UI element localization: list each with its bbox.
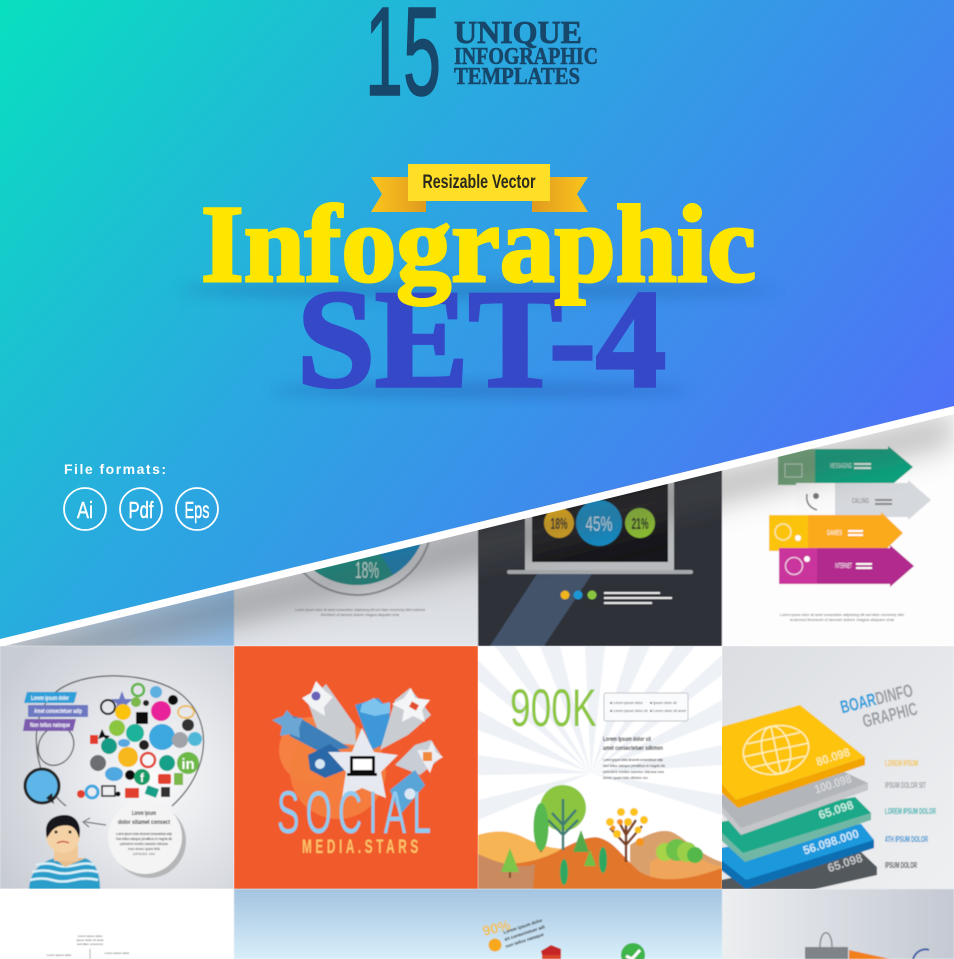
laptop with percentage circles: 21% — [632, 516, 648, 533]
panel: 900K landscape — [478, 646, 722, 889]
legend box: ■ Lorem ipsum dolor sit — [610, 709, 648, 713]
title: SET-4: SET-4 — [297, 262, 666, 417]
pie chart fragment — [282, 445, 432, 617]
small org chart text — [47, 934, 129, 959]
callout circle: Non tellus natoque penatibus et magnis dis — [116, 837, 172, 841]
pie chart fragment: tincidunt ut laoreet dolore magna aliquam erat — [321, 613, 399, 617]
stars — [272, 681, 443, 815]
arrow list: CALLING — [852, 498, 869, 505]
right labels: LOREM IPSUM — [885, 759, 918, 768]
text block — [603, 737, 665, 780]
text block: amet consectetuer sdkmon — [603, 746, 663, 752]
title: Infographic: Infographic — [201, 183, 756, 305]
shadow below diagonal — [6, 414, 954, 646]
heading: 15 unique infographic templates: UNIQUE — [454, 14, 582, 50]
text block: parturient montes nascetur ridiculus mus — [603, 770, 664, 774]
file formats: Pdf — [128, 497, 154, 523]
layers — [721, 705, 877, 890]
diagonal white stripe — [0, 406, 954, 647]
ribbon: Resizable Vector — [371, 164, 588, 212]
shopping bags — [805, 933, 929, 959]
arrow list: GAMES — [827, 530, 842, 537]
arrow list — [769, 446, 931, 622]
layers: 65.098 — [826, 851, 865, 875]
callout circle: ultricies nec — [133, 852, 155, 856]
heading: 15 unique infographic templates: INFOGRAPHIC — [454, 44, 598, 70]
small org chart text: Lorem ipsum dolor — [105, 951, 129, 955]
90% callout — [481, 916, 546, 952]
90% callout: 90% — [481, 916, 512, 939]
title: DINFO — [873, 680, 915, 709]
right labels: IPSUM DOLOR SIT — [885, 781, 926, 790]
arrow list: Lorem ipsum dolor sit amet consectetur adipiscing elit sed diam nonummy nibh — [780, 613, 904, 617]
small org chart text: Lorem ipsum dolor — [78, 934, 102, 938]
icon: red house — [541, 945, 561, 959]
ribbon: Resizable Vector: Resizable Vector — [422, 172, 536, 193]
text block: Non tellus natoque penatibus et magnis dis — [603, 764, 665, 768]
banners: Lorem ipsum dolor — [31, 695, 69, 702]
speech bubble outline — [36, 676, 204, 806]
arrow — [83, 818, 106, 827]
arrow list: MESSAGING — [830, 463, 852, 470]
pie chart fragment: Lorem ipsum dolor sit amet consectetur adipiscing elit sed diam nonummy nibh euismod — [295, 608, 425, 612]
heading: 15 unique infographic templates — [365, 0, 598, 122]
banners — [23, 692, 88, 731]
pie chart fragment: 18% — [355, 557, 379, 583]
callout circle: mus donec quam felis — [128, 847, 160, 851]
small org chart text: sed diam nonummy — [77, 942, 104, 946]
right labels — [885, 759, 936, 870]
icon: globe — [742, 724, 810, 776]
character — [29, 815, 100, 889]
laptop with percentage circles: 45% — [586, 513, 612, 536]
panel: stacked boards — [721, 646, 954, 890]
callout circle: Lorem ipsum dolor sit amet consectetuer adip — [116, 832, 172, 836]
900K text: 900K — [510, 678, 597, 738]
social icons cloud: f — [140, 771, 145, 785]
file formats: Eps — [184, 497, 210, 523]
arrow list: INTERNET — [835, 563, 852, 570]
heading: 15 unique infographic templates: TEMPLATES — [454, 64, 580, 90]
legend box: ■ Ipsum dolor sit — [650, 701, 677, 705]
90% callout: non tellus natoque — [505, 932, 545, 949]
small org chart text: Lorem ipsum dolor — [47, 953, 71, 957]
panel: top row thumbnails — [0, 414, 954, 646]
trees — [540, 785, 586, 831]
icon: blue speech bubble — [25, 769, 59, 804]
MEDIA.STARS text: MEDIA.STARS — [302, 837, 422, 858]
callout circle: dolor sitamet consect — [118, 819, 171, 826]
file formats: Ai — [77, 497, 93, 523]
text block: donec quam felis ultricies nec — [603, 776, 648, 780]
panel: social media stars — [234, 646, 478, 889]
callout circle — [108, 810, 186, 878]
landscape — [478, 785, 722, 889]
title: GRAPHIC — [860, 699, 920, 732]
legend box: ■ Lorem ipsum dolor — [610, 701, 644, 705]
panel: social speech bubble — [0, 646, 234, 889]
panel: bottom row — [0, 889, 954, 959]
90% callout: sit consectetuer adi — [504, 924, 546, 942]
90% callout: Lorem ipsum dolor — [503, 918, 543, 935]
banners: Amet consectetuer adip — [34, 708, 82, 715]
layers: 65.098 — [817, 798, 856, 822]
icon: green check — [621, 943, 645, 959]
laptop with percentage circles: 18% — [550, 516, 568, 533]
blue gradient hero background — [0, 0, 954, 639]
layers: 80.098 — [814, 745, 852, 769]
text block: Lorem Ipsum dolor sit — [603, 737, 651, 743]
legend box: ■ Lorem dolor sit amet — [650, 709, 686, 713]
social icons cloud: in — [181, 756, 195, 773]
layers: 56.098.000 — [801, 826, 861, 858]
callout circle: Lorem Ipsum — [132, 810, 156, 817]
arrow list: euismod tincidunt ut laoreet dolore magna aliquam erat — [790, 618, 894, 622]
right labels: IPSUM DOLOR — [885, 861, 917, 870]
small org chart text: ipsum dolor sit amet — [77, 938, 104, 942]
banners: Non tellus natoque — [30, 722, 70, 729]
text block: Lorem ipsum dolor sit amet consectetuer adip — [603, 758, 663, 762]
file formats: File formats: — [64, 461, 168, 477]
legend box — [604, 693, 688, 721]
SOCIAL text: SOCIAL — [277, 780, 437, 847]
layers: 100.098 — [813, 771, 853, 797]
title shadows — [178, 282, 778, 396]
social icons cloud — [77, 684, 202, 798]
laptop with percentage circles — [490, 470, 693, 646]
sun rays — [478, 646, 722, 820]
callout circle: parturient montes nascetur ridiculus — [120, 842, 168, 846]
title — [840, 684, 918, 728]
file formats — [64, 461, 218, 530]
title: BOAR — [838, 689, 878, 717]
